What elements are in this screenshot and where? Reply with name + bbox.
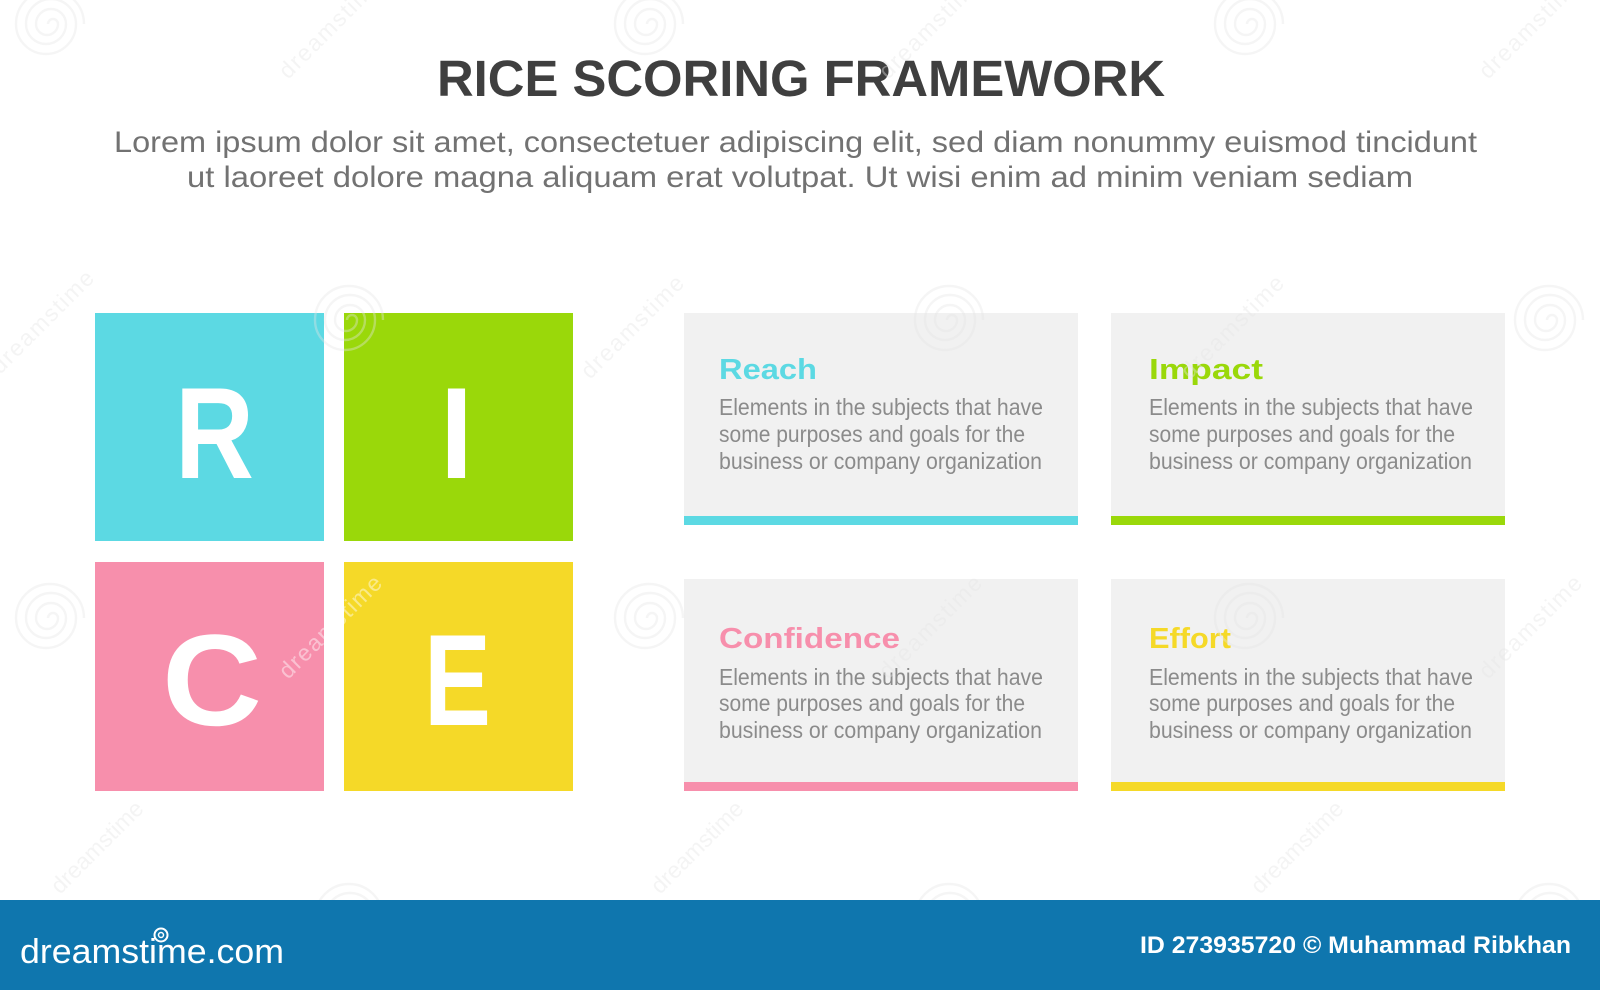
watermark overlay: dreamstime: [45, 795, 148, 899]
subtitle text: ut laoreet dolore magna aliquam erat volutpat. Ut wisi enim ad minim veniam sediam: [187, 161, 1413, 194]
subtitle text: Lorem ipsum dolor sit amet, consectetuer adipiscing elit, sed diam nonummy euismod tincidunt: [114, 126, 1478, 159]
logo: dreamstime.com: dreamstime.com: [20, 933, 284, 971]
panel: Reach: [684, 313, 1078, 525]
text: Reach description: Elements in the subjects that have: [719, 394, 1043, 420]
tile: C: C: [162, 607, 262, 753]
text: Effort description: [1149, 664, 1473, 743]
text: Effort description: some purposes and goals for the: [1149, 690, 1455, 716]
watermark overlay: dreamstime: [273, 570, 387, 684]
tile: E: E: [424, 607, 491, 753]
text: Confidence description: some purposes and goals for the: [719, 690, 1025, 716]
tile: I: I: [440, 360, 473, 506]
text: Reach description: some purposes and goals for the: [719, 421, 1025, 447]
footer banner: [0, 900, 1600, 990]
tile: R: R: [175, 360, 254, 506]
heading: Effort: Effort: [1149, 623, 1231, 655]
panel: Impact: [1111, 313, 1505, 525]
panel: Effort: [1111, 579, 1505, 791]
credit text: ID 273935720 © Muhammad Ribkhan: [1140, 932, 1571, 959]
text: Reach description: business or company organization: [719, 448, 1042, 474]
heading: Confidence: Confidence: [719, 623, 900, 655]
text: Effort description: business or company organization: [1149, 717, 1472, 743]
tile: E: [344, 562, 573, 791]
tile: C: [95, 562, 324, 791]
watermark overlay: dreamstime: [1175, 270, 1289, 384]
text: Impact description: [1149, 394, 1473, 474]
watermark overlay: dreamstime: [873, 570, 987, 684]
text: Effort description: Elements in the subjects that have: [1149, 664, 1473, 690]
tile: I: [344, 313, 573, 541]
text: Impact description: Elements in the subjects that have: [1149, 394, 1473, 420]
text: Confidence description: [719, 664, 1043, 743]
text: Reach description: [719, 394, 1043, 474]
heading: Impact: Impact: [1149, 354, 1263, 386]
RICE letter grid: [95, 313, 573, 791]
heading: Reach: Reach: [719, 354, 817, 386]
text: Confidence description: business or company organization: [719, 717, 1042, 743]
panel: Confidence: [684, 579, 1078, 791]
text: Impact description: business or company organization: [1149, 448, 1472, 474]
watermark overlay: dreamstime: [1245, 795, 1348, 899]
watermark overlay: dreamstime: [1473, 570, 1587, 684]
text: Impact description: some purposes and goals for the: [1149, 421, 1455, 447]
watermark overlay: dreamstime: [575, 270, 689, 384]
subtitle text: [114, 126, 1478, 194]
title: RICE SCORING FRAMEWORK: [437, 50, 1165, 107]
text: Confidence description: Elements in the subjects that have: [719, 664, 1043, 690]
watermark overlay: dreamstime: [645, 795, 748, 899]
tile: R: [95, 313, 324, 541]
